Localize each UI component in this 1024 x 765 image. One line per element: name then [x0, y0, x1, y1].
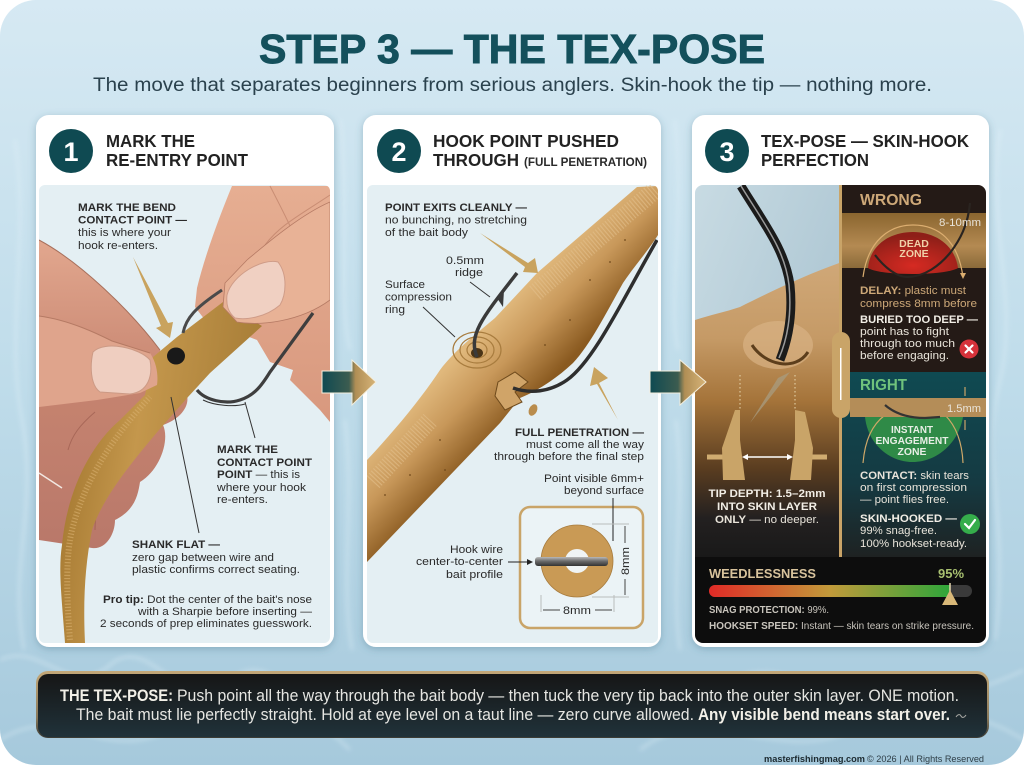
label: 1.5mm: 1.5mm — [947, 403, 981, 415]
arrow: gold pointer to mark — [133, 257, 173, 338]
label: surface compression ring: compression — [385, 292, 452, 304]
weedlessness gauge: 95% — [938, 566, 964, 581]
callout: mark the contact point: CONTACT POINT — [217, 457, 312, 469]
step 1 heading: MARK THE — [106, 131, 195, 151]
callout: point exits cleanly: of the bait body — [385, 227, 469, 239]
label: hook wire: center-to-center — [416, 556, 503, 568]
label: surface compression ring: Surface — [385, 279, 425, 291]
wrong explanation: DELAY: plastic must — [860, 285, 966, 297]
label: 0.5mm ridge: ridge — [455, 267, 483, 279]
diagram: bait cross-section — [520, 498, 643, 628]
banner line 1: Push point all the way through the bait body — then tuck the very tip back into the outer skin layer. ONE motion. — [177, 687, 959, 705]
callout: shank flat: zero gap between wire and — [132, 552, 274, 564]
label: 0.5mm ridge — [446, 255, 490, 297]
callout: point exits cleanly — [385, 202, 527, 239]
note: point visible — [544, 473, 644, 497]
footer credit — [764, 754, 984, 765]
callout: mark the contact point — [216, 444, 312, 506]
callout: mark the contact point: MARK THE — [217, 444, 278, 456]
callout: mark the bend contact point: hook re-enters. — [78, 240, 158, 252]
illustration: fingers holding the bait — [39, 185, 330, 643]
instant engagement zone label — [876, 424, 949, 458]
step 3 number badge — [705, 129, 749, 173]
label: 8-10mm: 8-10mm — [939, 217, 981, 229]
callout: point exits cleanly: POINT EXITS CLEANLY — — [385, 202, 527, 214]
diagram: bait cross-section: 8mm — [620, 547, 632, 575]
step 1 number badge: 1 — [63, 137, 79, 167]
dead zone label — [899, 238, 929, 260]
right explanation: — point flies free. — [860, 494, 949, 506]
step 2 heading: (FULL PENETRATION) — [524, 157, 647, 169]
panel: step 3 tex-pose skin-hook perfection — [692, 115, 989, 647]
right explanation: 100% hookset-ready. — [860, 538, 967, 550]
pro tip — [100, 594, 312, 630]
step 1 heading: RE-ENTRY POINT — [106, 150, 248, 170]
callout: mark the contact point: re-enters. — [217, 494, 268, 506]
weedlessness gauge: HOOKSET SPEED: Instant — skin tears on strike pressure. — [709, 620, 974, 632]
label: surface compression ring: ring — [385, 304, 405, 316]
callout: shank flat: plastic confirms correct seating. — [132, 564, 300, 576]
callout: full penetration — [494, 427, 645, 463]
step 2 heading: HOOK POINT PUSHED — [433, 131, 619, 151]
instant engagement zone label: ZONE — [898, 446, 926, 458]
caption: tip depth — [708, 488, 826, 526]
callout: shank flat: SHANK FLAT — — [132, 539, 220, 551]
note: point visible: Point visible 6mm+ — [544, 473, 644, 485]
icon: small wave mark — [956, 715, 966, 717]
pro tip: Pro tip: Dot the center of the bait's nose — [103, 594, 312, 606]
weedlessness gauge: WEEDLESSNESS — [709, 566, 816, 581]
right explanation: CONTACT: skin tears — [860, 470, 970, 482]
callout: mark the contact point: where your hook — [216, 482, 307, 494]
banner line 2: The bait must lie perfectly straight. Hold at eye level on a taut line — zero curve allowed. — [76, 706, 694, 724]
wrong heading: WRONG — [860, 192, 922, 209]
illustration: bait with hook through — [367, 185, 658, 643]
callout: shank flat — [132, 539, 300, 576]
icon: red cross — [960, 340, 978, 358]
callout: mark the bend contact point: MARK THE BEND — [78, 202, 176, 214]
step 2 heading — [433, 131, 647, 170]
callout: full penetration: FULL PENETRATION — — [515, 427, 644, 439]
callout: mark the bend contact point — [78, 202, 187, 252]
step 2 number badge: 2 — [391, 137, 407, 167]
note: point visible: beyond surface — [564, 485, 644, 497]
icon: green check — [960, 514, 980, 534]
callout: mark the bend contact point: CONTACT POINT — — [78, 214, 187, 226]
label: surface compression ring — [385, 279, 455, 337]
pro tip: with a Sharpie before inserting — — [137, 606, 312, 618]
label: hook wire — [416, 544, 533, 581]
caption: tip depth: TIP DEPTH: 1.5–2mm — [708, 488, 826, 500]
step 1 heading — [106, 131, 248, 170]
wrong explanation: BURIED TOO DEEP — — [860, 314, 978, 326]
arrow: gold pointer to full penetration — [590, 367, 618, 420]
footer credit: masterfishingmag.com — [764, 754, 865, 765]
caption: tip depth: INTO SKIN LAYER — [717, 501, 817, 513]
label: hook wire: Hook wire — [450, 544, 503, 556]
label: hook wire: bait profile — [446, 569, 503, 581]
pro tip: 2 seconds of prep eliminates guesswork. — [100, 618, 312, 630]
panel: step 2 hook point pushed through — [363, 115, 661, 647]
callout: mark the contact point: POINT — this is — [217, 469, 301, 481]
banner line 2: Any visible bend means start over. — [698, 706, 950, 724]
banner line 1: THE TEX-POSE: — [60, 687, 173, 705]
diagram: bait cross-section: 8mm — [563, 605, 591, 617]
step 1 number badge — [49, 129, 93, 173]
step 3 number badge: 3 — [719, 137, 735, 167]
caption: tip depth: ONLY — no deeper. — [715, 514, 819, 526]
panel: step 1 mark the re-entry point — [36, 115, 334, 647]
arrow: step 2 to step 3 — [650, 360, 706, 405]
wrong explanation: before engaging. — [860, 350, 949, 362]
dead zone label: DEAD — [899, 238, 929, 250]
step 3 heading: TEX-POSE — SKIN-HOOK — [761, 131, 969, 151]
right explanation: SKIN-HOOKED — — [860, 513, 957, 525]
label: 0.5mm ridge: 0.5mm — [446, 255, 484, 267]
instant engagement zone label: INSTANT — [891, 424, 934, 436]
dead zone label: ZONE — [899, 248, 929, 260]
callout: mark the bend contact point: this is where your — [78, 227, 171, 239]
title: STEP 3 — THE TEX-POSE — [259, 26, 765, 72]
leader lines — [171, 397, 255, 533]
wrong explanation: point has to fight — [860, 326, 949, 338]
subtitle: The move that separates beginners from serious anglers. Skin-hook the tip — nothing more. — [93, 75, 932, 96]
step 2 number badge — [377, 129, 421, 173]
callout: full penetration: must come all the way — [526, 439, 645, 451]
step 3 heading — [761, 131, 969, 170]
footer credit: © 2026 | All Rights Reserved — [867, 754, 984, 765]
weedlessness gauge — [709, 566, 974, 632]
bottom banner — [36, 671, 989, 738]
wrong explanation — [860, 285, 978, 362]
arrow: step 1 to step 2 — [322, 360, 376, 405]
right explanation — [860, 470, 970, 550]
weedlessness gauge: SNAG PROTECTION: 99%. — [709, 604, 829, 616]
arrow: gold pointer to exit — [480, 233, 538, 273]
illustration: skin-hook close-up with caliper — [695, 185, 986, 643]
right explanation: 99% snag-free. — [860, 525, 937, 537]
step 2 heading: THROUGH — [433, 150, 519, 170]
instant engagement zone label: ENGAGEMENT — [876, 435, 949, 447]
step 3 heading: PERFECTION — [761, 150, 869, 170]
wrong explanation: through too much — [860, 338, 955, 350]
wrong explanation: compress 8mm before — [860, 298, 977, 310]
right heading: RIGHT — [860, 377, 907, 394]
callout: full penetration: through before the final step — [494, 451, 644, 463]
callout: point exits cleanly: no bunching, no stretching — [385, 214, 527, 226]
right explanation: on first compression — [860, 482, 967, 494]
